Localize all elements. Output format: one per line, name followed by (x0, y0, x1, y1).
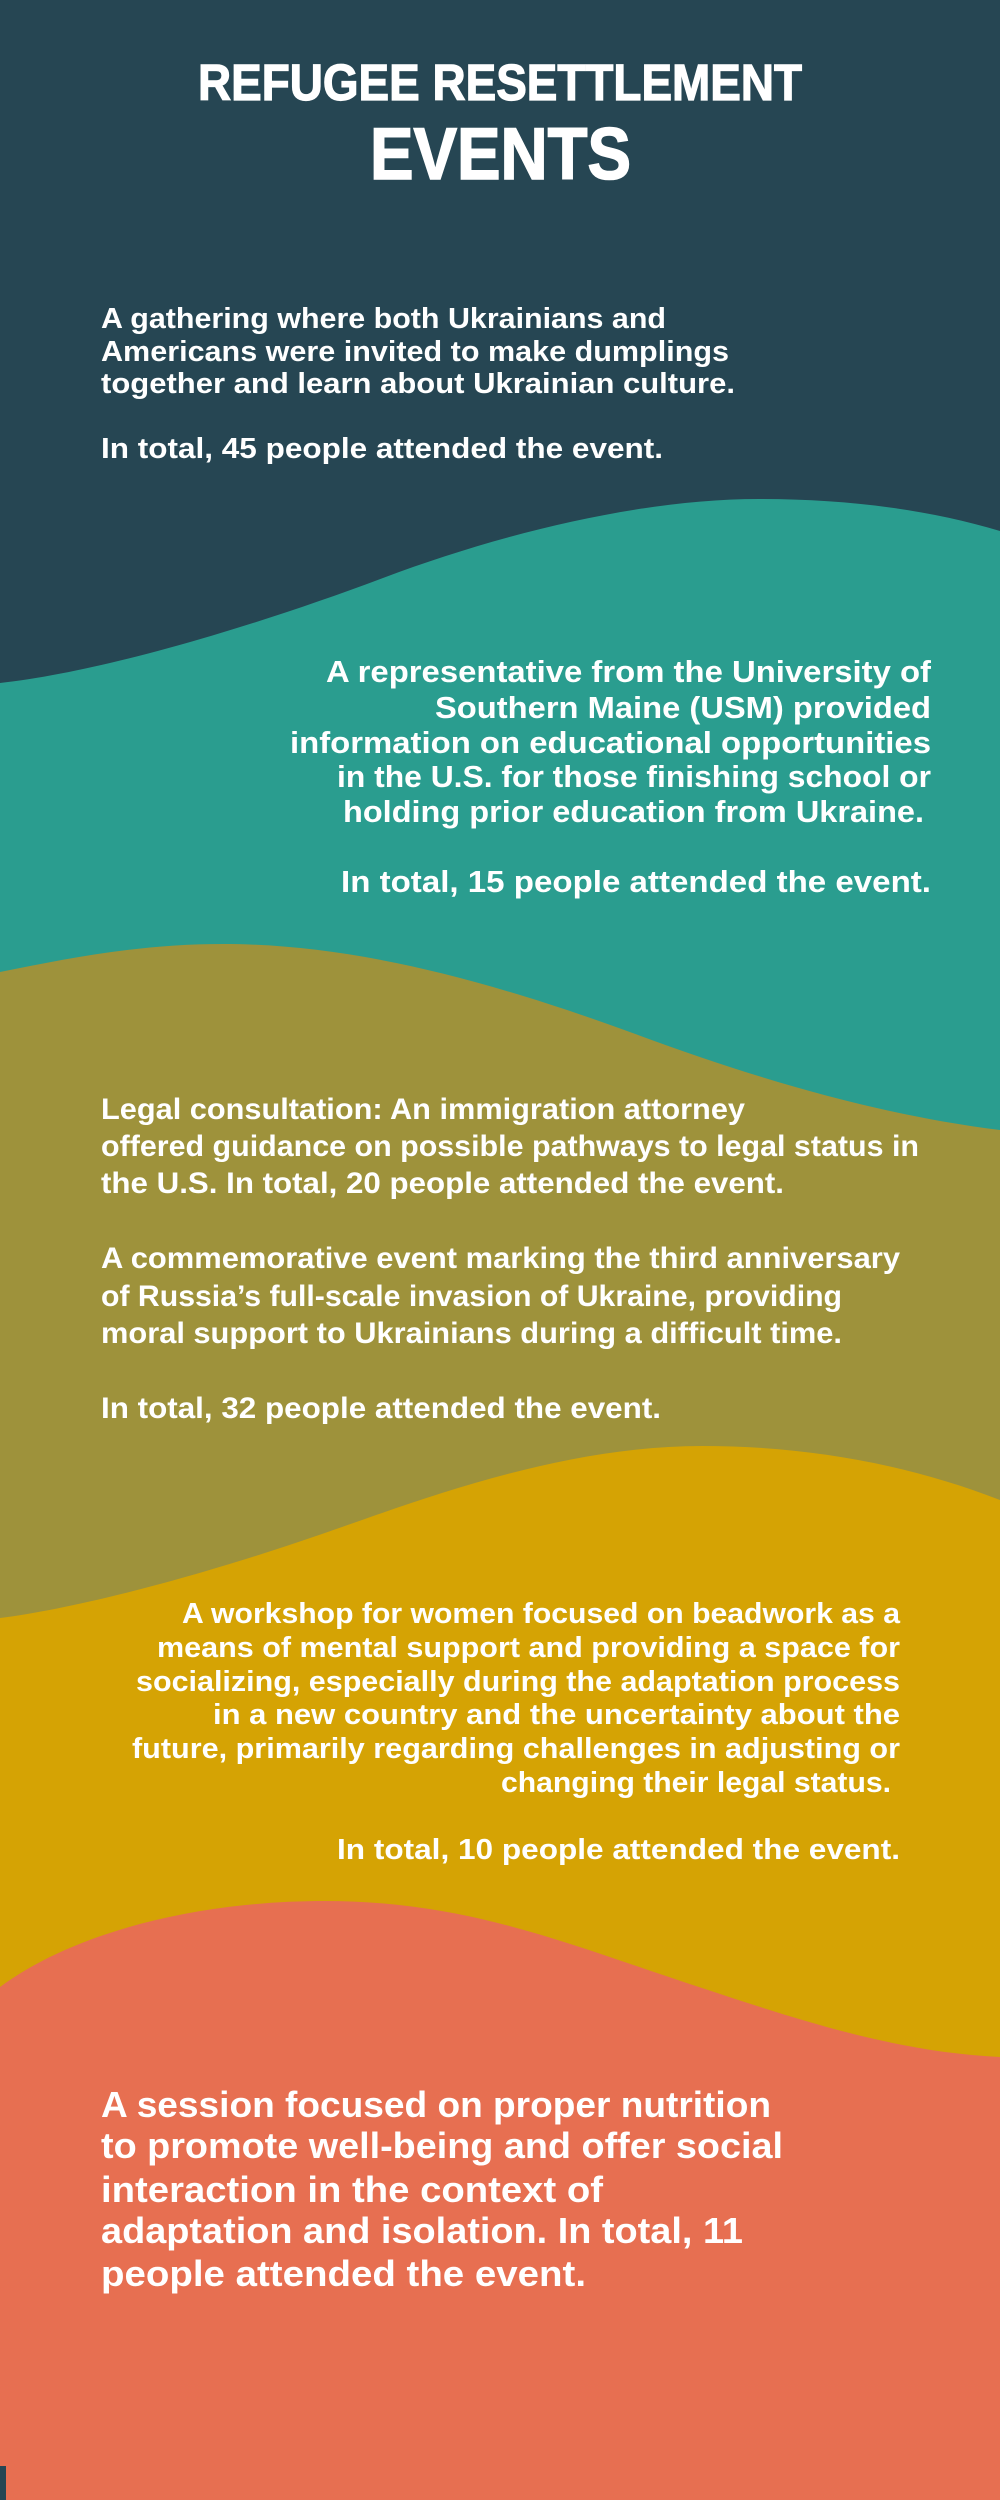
text block: USM education session: In total, 15 people attended the event. (341, 864, 931, 899)
text block: invasion anniversary: A commemorative event marking the third anniversary (101, 1242, 900, 1275)
text block: beadwork workshop: socializing, especially during the adaptation process (136, 1666, 900, 1698)
text block: USM education session (290, 654, 932, 899)
text block: nutrition session: people attended the event. (101, 2253, 586, 2294)
text block: nutrition session: to promote well-being and offer social (101, 2125, 783, 2166)
panel: yellow wave (0, 1446, 1000, 2065)
heading: refugee resettlement: REFUGEE RESETTLEMENT (198, 54, 802, 111)
text block: legal consultation: Legal consultation: An immigration attorney (101, 1093, 745, 1126)
text block: nutrition session: interaction in the context of (101, 2169, 604, 2210)
text block: legal consultation: the U.S. In total, 20 people attended the event. (101, 1167, 784, 1200)
wave shape: teal (0, 499, 1000, 1140)
text block: dumpling gathering: Americans were invited to make dumplings (101, 336, 729, 368)
text block: dumpling gathering: together and learn about Ukrainian culture. (101, 368, 735, 400)
text block: beadwork workshop: In total, 10 people attended the event. (337, 1834, 900, 1866)
text block: USM education session: in the U.S. for those finishing school or (337, 759, 931, 794)
text block: USM education session: Southern Maine (USM) provided (435, 690, 931, 725)
text block: dumpling gathering (101, 303, 735, 465)
text block: beadwork workshop: changing their legal status. (501, 1767, 891, 1799)
text block: USM education session: information on educational opportunities (290, 725, 931, 760)
text block: invasion anniversary (101, 1242, 900, 1425)
panel: coral wave (0, 1901, 1000, 2500)
text block: nutrition session: adaptation and isolation. In total, 11 (101, 2210, 743, 2251)
text block: legal consultation: offered guidance on possible pathways to legal status in (101, 1130, 919, 1163)
corner tab (0, 2466, 6, 2500)
text block: beadwork workshop: means of mental support and providing a space for (157, 1632, 900, 1664)
wave shape: yellow (0, 1446, 1000, 2065)
text block: nutrition session: A session focused on proper nutrition (101, 2084, 771, 2125)
text block: invasion anniversary: In total, 32 people attended the event. (101, 1392, 661, 1425)
panel: teal wave (0, 499, 1000, 1140)
text block: legal consultation (101, 1093, 919, 1200)
text block: nutrition session (101, 2084, 783, 2294)
text block: invasion anniversary: moral support to Ukrainians during a difficult time. (101, 1317, 842, 1350)
text block: dumpling gathering: In total, 45 people attended the event. (101, 433, 663, 465)
wave shape: olive (0, 944, 1000, 1630)
title (198, 54, 802, 195)
text block: beadwork workshop: future, primarily regarding challenges in adjusting or (132, 1733, 900, 1765)
text block: invasion anniversary: of Russia’s full-scale invasion of Ukraine, providing (101, 1280, 842, 1313)
text block: USM education session: A representative from the University of (326, 654, 932, 689)
wave shape: coral (0, 1901, 1000, 2500)
panel: olive wave (0, 944, 1000, 1630)
heading: events: EVENTS (370, 114, 631, 195)
text block: beadwork workshop: A workshop for women focused on beadwork as a (182, 1598, 901, 1630)
text block: beadwork workshop: in a new country and the uncertainty about the (213, 1699, 900, 1731)
text block: beadwork workshop (132, 1598, 901, 1866)
text block: USM education session: holding prior education from Ukraine. (343, 794, 924, 829)
text block: dumpling gathering: A gathering where both Ukrainians and (101, 303, 666, 335)
